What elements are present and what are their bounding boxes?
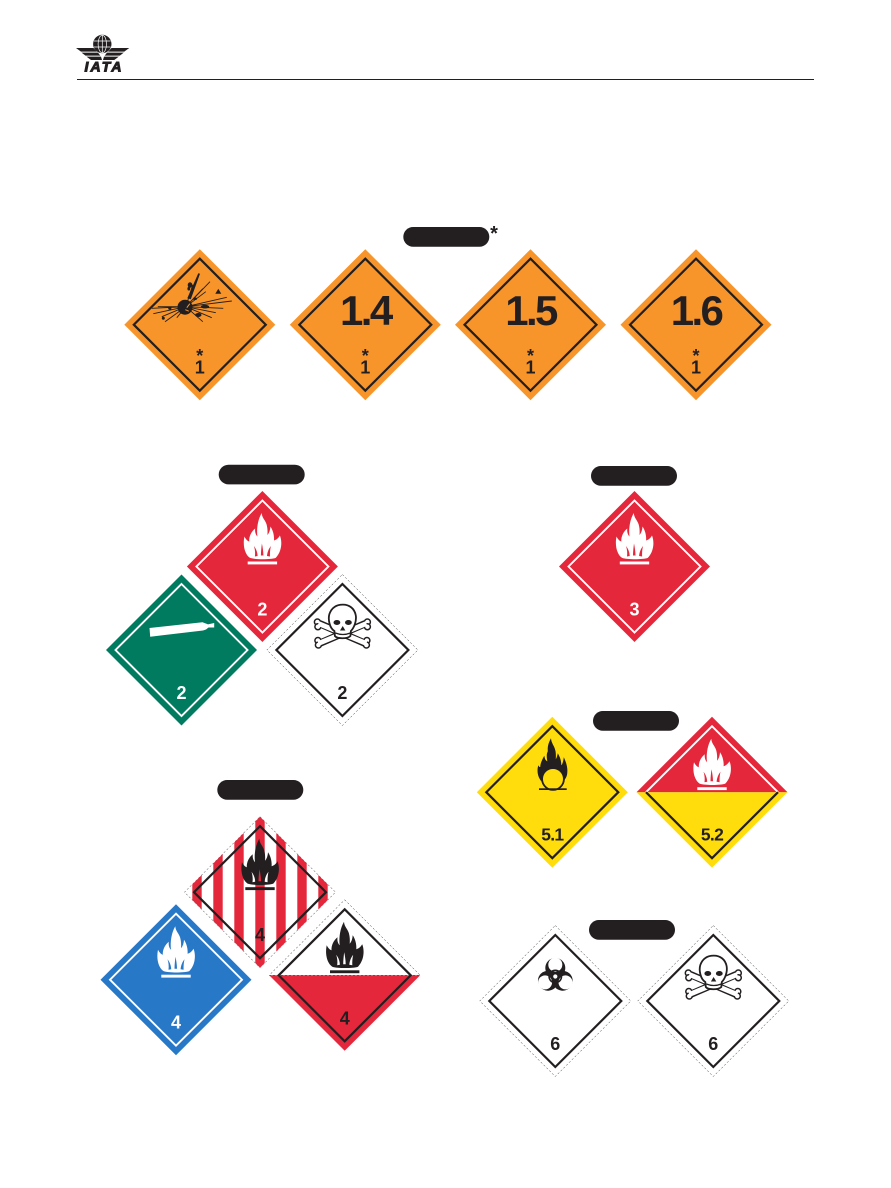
placard: dangerous when wet — [100, 904, 252, 1055]
placard: flammable liquid — [559, 491, 710, 642]
icon: skull and crossbones — [685, 956, 741, 999]
panel: class 3 flammable liquids — [559, 466, 710, 642]
placard: toxic substance — [638, 926, 789, 1076]
placard: division 1.5: * — [527, 346, 534, 366]
placard: division 1.4 — [290, 249, 441, 400]
placard: non-flammable gas — [106, 574, 257, 726]
red stripes — [192, 816, 328, 968]
placard: division 1.6: * — [692, 346, 700, 366]
icon: skull and crossbones — [314, 605, 370, 648]
icon: gas cylinder — [150, 622, 214, 637]
division number: 1.5 — [505, 287, 558, 334]
placard: spontaneously combustible: 4 — [340, 1008, 350, 1028]
panel: class 6 toxic and infectious — [480, 920, 789, 1076]
footnote asterisk: * — [490, 223, 498, 245]
placard: organic peroxide 5.2 — [636, 717, 788, 868]
class 1 label pill — [403, 227, 489, 247]
icon: flame — [157, 926, 195, 978]
division number: 1.4 — [340, 287, 394, 334]
placard: infectious substance — [480, 926, 631, 1076]
placard: dangerous when wet: 4 — [171, 1013, 181, 1033]
icon: biohazard — [538, 958, 573, 991]
panel: class 5 oxidizers — [477, 711, 788, 868]
placard: division 1.5: 1 — [525, 358, 536, 378]
placard: flammable solid: 4 — [255, 925, 265, 945]
placard: division 1.4: 1 — [360, 358, 370, 378]
header: IATA logo — [76, 35, 129, 75]
class number: 1 — [195, 358, 205, 378]
icon: flame — [616, 513, 653, 564]
placard: non-flammable gas: 2 — [176, 683, 187, 703]
placard: flammable liquid: 3 — [629, 600, 640, 620]
placard: division 1.4: * — [362, 346, 369, 366]
panel: class 1 explosives — [124, 223, 772, 400]
division number: 1.6 — [671, 287, 723, 334]
placard: spontaneously combustible — [269, 900, 420, 1051]
placard: infectious substance: 6 — [550, 1034, 560, 1054]
icon: flame — [693, 739, 731, 790]
icon: globe — [93, 35, 112, 53]
placard: toxic gas — [267, 574, 418, 726]
placard: toxic substance: 6 — [708, 1034, 718, 1054]
placard: oxidizer 5.1 — [477, 717, 628, 868]
icon: flame over circle — [538, 738, 567, 790]
placard: flammable solid — [184, 816, 336, 968]
class 4 label pill — [217, 780, 303, 800]
page: dangerous goods hazard labels — [76, 34, 814, 1076]
icon: flame — [326, 922, 364, 973]
icon: exploding bomb — [152, 273, 232, 322]
header rule — [77, 79, 814, 80]
placard: flammable gas — [187, 491, 338, 642]
placard: division 1.6: 1 — [691, 358, 701, 378]
class 3 label pill — [591, 466, 677, 486]
panel: class 2 gases — [106, 465, 418, 726]
logo wordmark: IATA — [84, 59, 122, 75]
class 2 label pill — [219, 465, 305, 484]
placard: flammable gas: 2 — [257, 600, 267, 620]
icon: wings — [76, 48, 129, 60]
class 5 label pill — [593, 711, 679, 731]
placard: organic peroxide 5.2: 5.2 — [701, 825, 724, 845]
placard: toxic gas: 2 — [337, 683, 347, 703]
placard: division 1.6 — [620, 249, 772, 400]
placard: explosive bomb — [124, 249, 275, 400]
placard: oxidizer 5.1: 5.1 — [541, 825, 564, 845]
class 6 label pill — [589, 920, 675, 940]
panel: class 4 flammable solids — [100, 780, 420, 1055]
placard: division 1.5 — [455, 249, 606, 400]
icon: flame — [241, 839, 279, 890]
icon: flame — [244, 513, 281, 564]
asterisk: * — [196, 346, 203, 366]
